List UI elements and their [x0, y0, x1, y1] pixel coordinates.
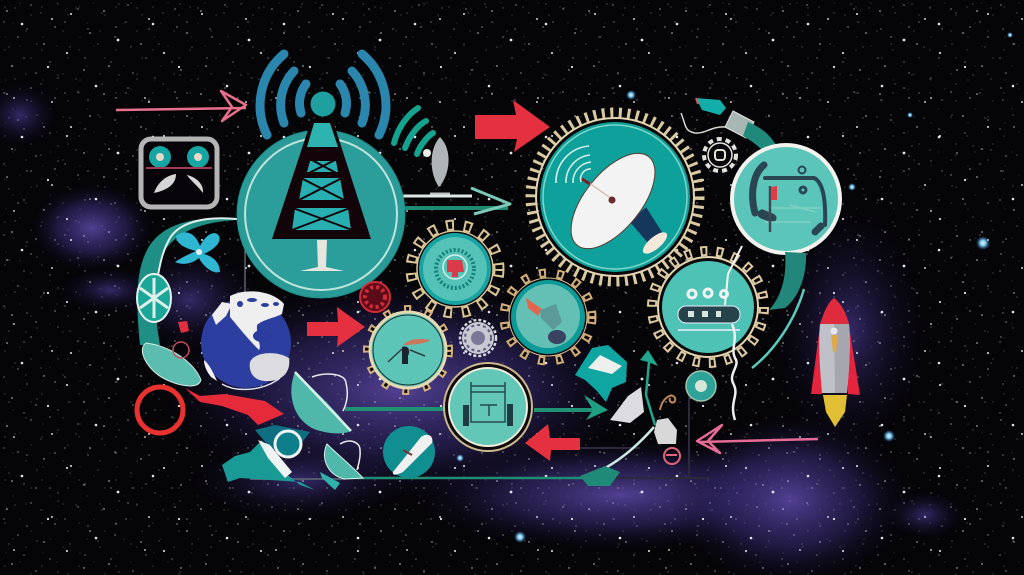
icon: rocket	[811, 298, 860, 427]
circle panel lower middle	[444, 363, 532, 451]
icon: globe	[201, 291, 291, 389]
icon: round teal dish	[383, 426, 435, 478]
icon: teal torn note	[575, 345, 627, 402]
thin connector lines	[245, 240, 710, 479]
icon: small red marks	[173, 321, 189, 358]
icon: machine drawing	[466, 382, 510, 426]
icon: small white gear	[704, 139, 736, 171]
icon: teal cable plug	[681, 98, 776, 150]
wavy white signal	[732, 324, 737, 420]
gear panel middle left	[367, 309, 449, 391]
icon: square control panel	[141, 139, 217, 207]
icon: teal leaf gear on band	[137, 274, 171, 322]
icon: signal waves	[556, 146, 591, 183]
arrow: pink top-left	[116, 91, 246, 121]
icon: torn teal satellite pile	[222, 425, 340, 490]
icon: small teal gear	[686, 371, 716, 401]
icon: insect satellite	[403, 339, 431, 345]
gear panel middle right	[504, 273, 592, 361]
icon: teal butterfly snowflake	[175, 232, 220, 272]
icon: white lace gear	[460, 320, 496, 356]
arrow: red left	[525, 424, 580, 461]
icon: curved teal band left	[137, 218, 237, 345]
arrow: green into dish	[534, 395, 608, 420]
tower panel	[237, 92, 405, 298]
icon: dark frame drawing	[753, 165, 825, 232]
arrow: curved teal swoosh right	[752, 252, 806, 368]
icon: torn red paper	[526, 298, 542, 316]
icon: red ring	[137, 387, 183, 433]
icon: red flag	[769, 186, 771, 232]
icon: tower stand	[300, 240, 344, 271]
big dish panel	[531, 113, 699, 281]
icon: orange squiggle	[660, 396, 675, 410]
icon: white dish	[555, 139, 671, 263]
icon: small dish with signal	[394, 108, 450, 194]
arrow: large red top	[475, 100, 550, 152]
icon: dark router bar	[678, 306, 740, 323]
icon: small pink ring	[664, 448, 680, 464]
arrow: pink from rocket	[697, 425, 818, 453]
icon: red lace gear	[360, 282, 390, 312]
gear panel lower right	[652, 246, 764, 363]
arrow: green to circle	[345, 407, 452, 411]
arrow: red from globe	[185, 388, 284, 425]
icon: radio tower	[272, 121, 371, 239]
icon: satellite junction and arrow	[580, 350, 677, 486]
icon: wifi signal arcs	[260, 54, 386, 135]
icon: teal dish small	[324, 441, 363, 479]
icon: red emblem	[447, 260, 464, 277]
icon: dish stem	[630, 207, 662, 243]
gear panel top middle	[411, 225, 499, 313]
arrow: double teal right	[400, 188, 510, 214]
icon: antenna ball	[310, 92, 336, 116]
icon: teal dish large	[291, 372, 351, 433]
right ring panel	[732, 145, 840, 253]
icon: teal dish base left	[142, 343, 201, 386]
arrow: red to gear	[307, 307, 365, 347]
